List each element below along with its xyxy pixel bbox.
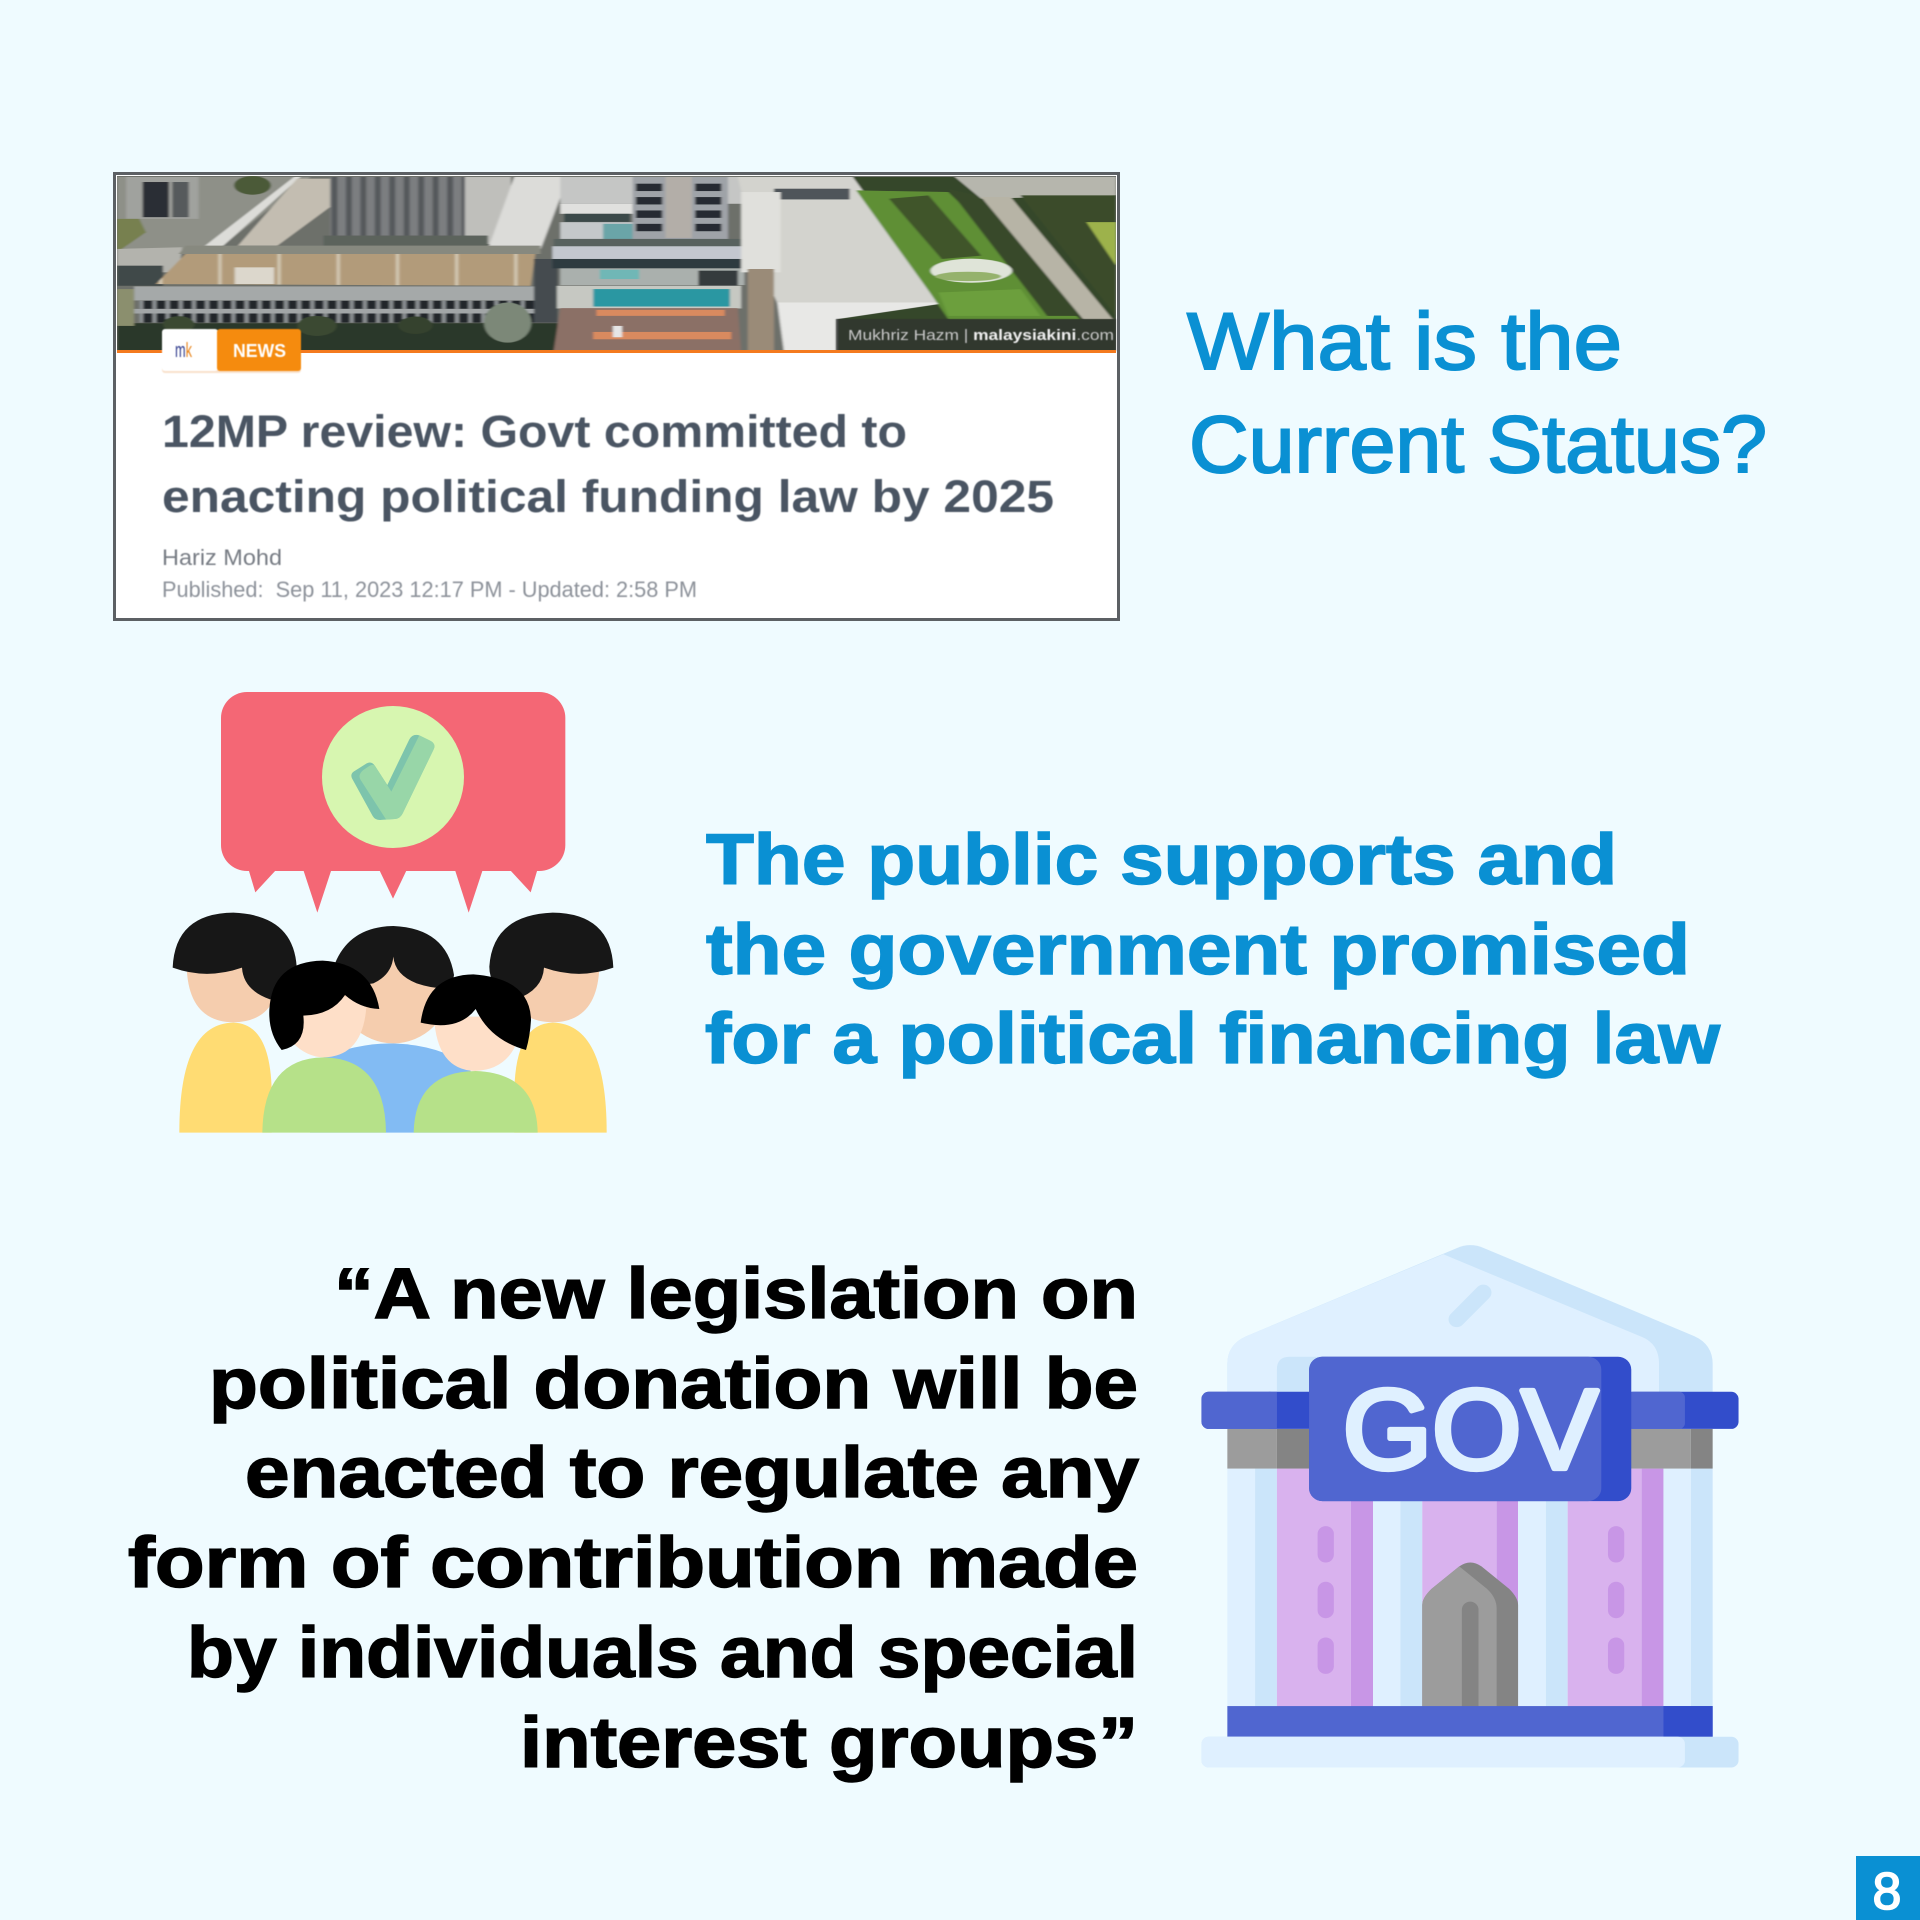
blue beam [1201,1392,1739,1429]
GOV sign: GOV [1343,1366,1598,1493]
heading: public supports statement: The public supports and [706,821,1617,900]
person: back right [489,913,613,1133]
badge: mk NEWS: mk [175,340,193,362]
door [1422,1562,1518,1709]
icon: government building [1201,1245,1739,1768]
quote: legislation on political donation: enacted to regulate any [245,1434,1140,1513]
news card frame and white background [113,172,1120,621]
badge: mk NEWS [161,328,302,374]
base and step [1201,1706,1739,1768]
heading: public supports statement [705,821,1722,1079]
quote: legislation on political donation: “A new legislation on [334,1255,1138,1334]
person: back left [173,913,297,1133]
panel: news article screenshot [113,172,1120,621]
icon: check mark [322,706,464,848]
icon: public crowd with approval speech bubble [172,692,614,1133]
heading: public supports statement: the government promised [706,911,1690,990]
person: front left [262,961,386,1133]
heading: What is the Current Status?: What is the [1187,297,1622,387]
photo credit caption: Mukhriz Hazm | malaysiakini .com [848,327,1114,344]
photo credit caption [835,318,1117,352]
quote: legislation on political donation: by individuals and special [187,1614,1138,1693]
orange divider under photo [117,350,1116,353]
roof pediment [1227,1245,1713,1398]
quote: legislation on political donation: interest groups” [520,1704,1138,1783]
article headline: 12MP review: Govt committed to [162,406,907,457]
window slots [1318,1526,1624,1674]
heading: What is the Current Status? [1186,297,1767,490]
quote: legislation on political donation [128,1255,1140,1783]
gray cornice band [1227,1429,1713,1469]
person: center [310,926,480,1133]
person: front right [414,974,538,1133]
speech bubble [221,692,565,913]
byline and publish date [162,545,697,602]
badge: mk NEWS: NEWS [233,341,286,361]
quote: legislation on political donation: form of contribution made [128,1524,1138,1603]
page number badge [1856,1856,1920,1920]
heading: public supports statement: for a political financing law [705,1000,1721,1079]
article headline [162,406,1054,522]
heading: What is the Current Status?: Current Status? [1189,400,1767,490]
article headline: enacting political funding law by 2025 [162,471,1054,522]
columns and walls [1227,1469,1713,1708]
byline and publish date: Hariz Mohd [162,545,282,570]
page number badge: 8 [1873,1863,1901,1920]
quote: legislation on political donation: political donation will be [209,1345,1138,1424]
byline and publish date: Published: Sep 11, 2023 12:17 PM - Updated: 2:58 PM [162,577,697,602]
news photo of parliament building [117,176,1116,350]
